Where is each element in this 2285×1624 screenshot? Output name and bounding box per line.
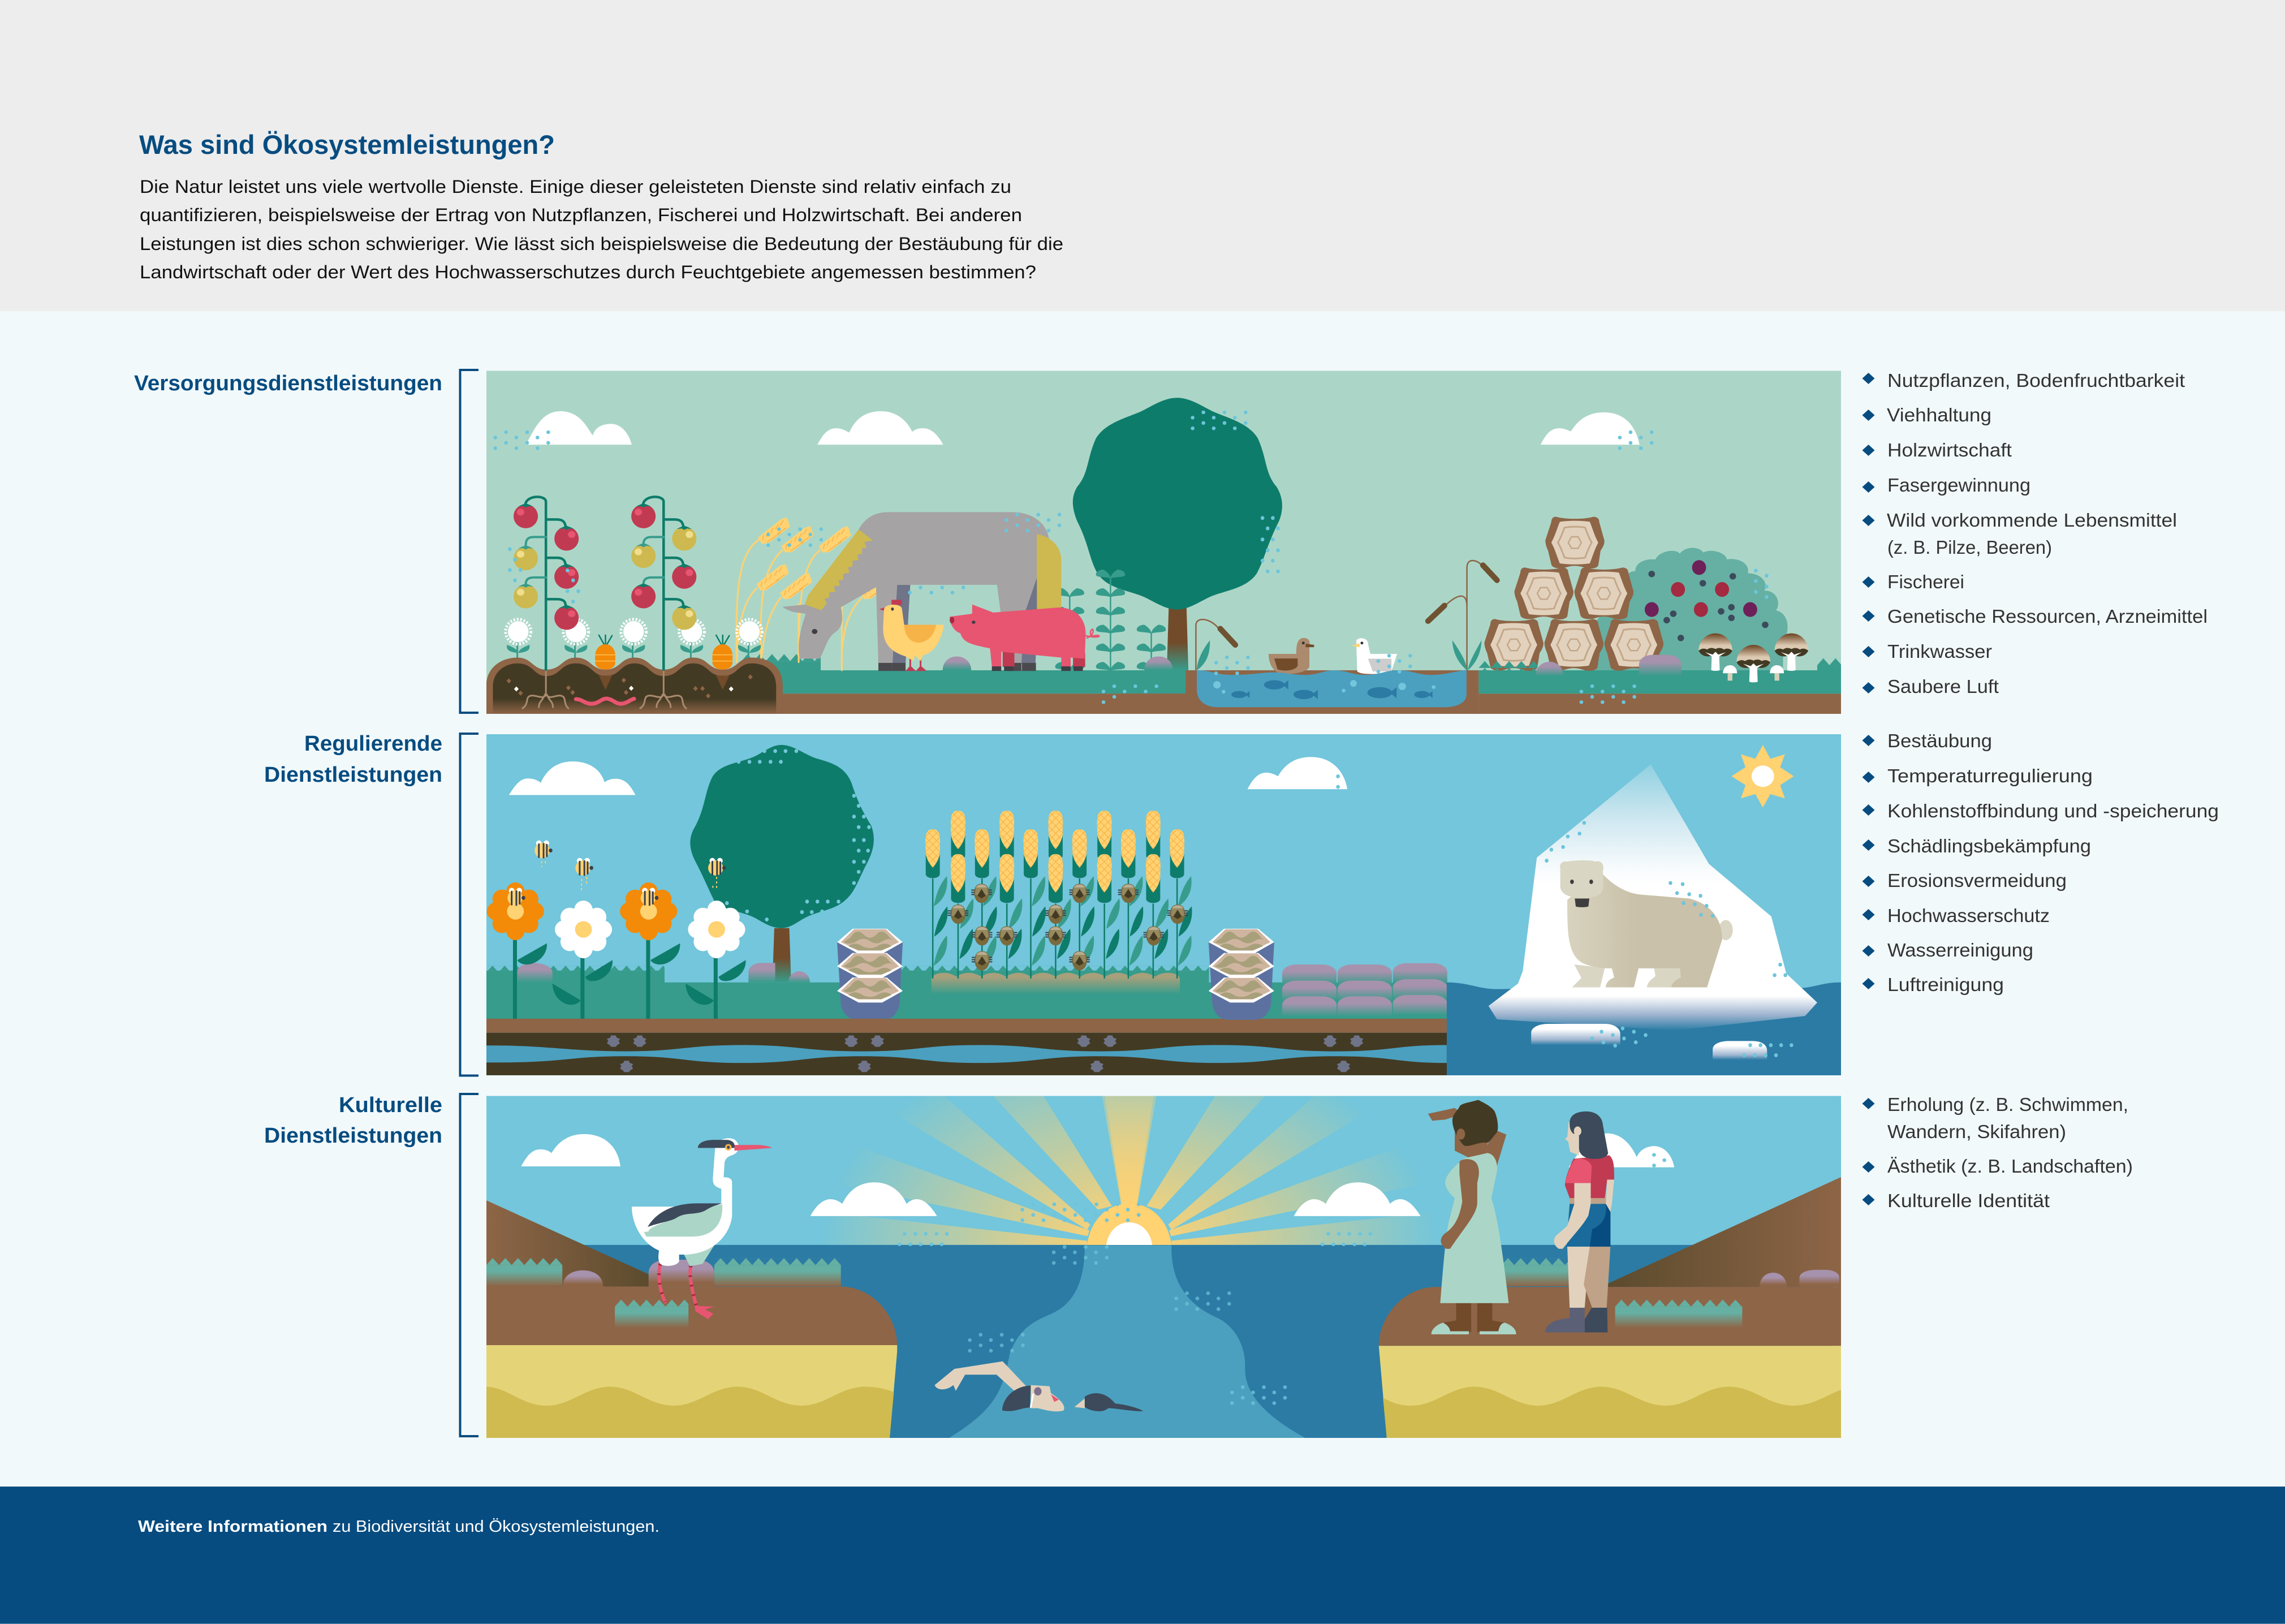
bees bbox=[507, 841, 726, 906]
corn plants bbox=[925, 811, 1192, 978]
white duck bbox=[1352, 638, 1397, 674]
cloud bbox=[509, 761, 636, 795]
list: Kulturelle Dienstleistungen: Erholung (z. B. Schwimmen, bbox=[1887, 1094, 2128, 1115]
raised bed bbox=[932, 973, 1180, 994]
heading: Regulierende Dienstleistungen: Dienstleistungen bbox=[264, 763, 442, 787]
iceberg bbox=[1489, 764, 1817, 1031]
sea bbox=[486, 1245, 1832, 1438]
water dots bbox=[1338, 776, 1791, 1056]
list: Regulierende Dienstleistungen: Kohlenstoffbindung und -speicherung bbox=[1887, 800, 2219, 821]
rocks grid bbox=[1282, 963, 1447, 1016]
rocks right bbox=[1144, 655, 1682, 676]
list: Regulierende Dienstleistungen: Bestäubung bbox=[1887, 730, 1992, 751]
list: Regulierende Dienstleistungen bbox=[1862, 730, 2219, 995]
list: Regulierende Dienstleistungen: Schädlingsbekämpfung bbox=[1887, 835, 2091, 856]
grass behind woman bbox=[1502, 1258, 1591, 1286]
tomato plant 1 bbox=[514, 497, 579, 670]
cloud bbox=[1248, 757, 1347, 789]
ground bbox=[741, 654, 1216, 714]
water dots right bbox=[1174, 1153, 1666, 1405]
right half of scene bbox=[1174, 1100, 1842, 1438]
list: Versorgungsdienstleistungen: Nutzpflanzen, Bodenfruchtbarkeit bbox=[1887, 370, 2185, 391]
tree bbox=[1073, 398, 1282, 670]
rocks bbox=[518, 963, 810, 983]
list: Kulturelle Dienstleistungen: Ästhetik (z. B. Landschaften) bbox=[1887, 1156, 2133, 1177]
intro text: Leistungen ist dies schon schwieriger. Wie lässt sich beispielsweise die Bedeutung der Bestäubung für die bbox=[140, 234, 1063, 254]
list: Versorgungsdienstleistungen: Genetische Ressourcen, Arzneimittel bbox=[1887, 606, 2208, 627]
heading: Versorgungsdienstleistungen: Versorgungsdienstleistungen bbox=[134, 372, 442, 395]
brown duck bbox=[1269, 638, 1314, 674]
list: Versorgungsdienstleistungen: Holzwirtschaft bbox=[1887, 440, 2012, 460]
water dots bbox=[493, 430, 1158, 704]
bracket: Kultur bbox=[460, 1094, 478, 1436]
wood logs bbox=[1485, 516, 1663, 671]
footer text: zu Biodiversität und Ökosystemleistungen. bbox=[333, 1518, 659, 1536]
heron bbox=[632, 1138, 772, 1319]
pot stack right bbox=[1209, 929, 1274, 1020]
list: Regulierende Dienstleistungen: Erosionsvermeidung bbox=[1887, 870, 2067, 891]
soil layers and groundwater bbox=[486, 1019, 1448, 1075]
left half of scene: crops, livestock, ground bbox=[486, 411, 1216, 714]
pond bbox=[1197, 670, 1467, 707]
ground right bbox=[1122, 670, 1844, 714]
list: Regulierende Dienstleistungen: Wasserreinigung bbox=[1887, 940, 2033, 960]
cloud bbox=[1541, 412, 1640, 445]
list: Versorgungsdienstleistungen: (z. B. Pilze, Beeren) bbox=[1887, 537, 2052, 558]
heading: Kulturelle Dienstleistungen: Kulturelle bbox=[339, 1093, 442, 1117]
sun rays bbox=[803, 1096, 1455, 1245]
pot stack left bbox=[837, 929, 903, 1020]
tomato plant 2 bbox=[631, 497, 696, 670]
list: Regulierende Dienstleistungen: Hochwasserschutz bbox=[1887, 905, 2050, 926]
carrots bbox=[595, 635, 732, 670]
swimmer bbox=[935, 1362, 1143, 1411]
panel: Regulierende Dienstleistungen illustration bbox=[486, 734, 1842, 1075]
list: Versorgungsdienstleistungen: Saubere Luft bbox=[1887, 676, 1999, 697]
water dots right bbox=[1214, 430, 1766, 704]
heading: Regulierende Dienstleistungen: Regulierende bbox=[304, 732, 442, 756]
wheat bbox=[736, 518, 893, 670]
rocks and grass right bbox=[1615, 1270, 1839, 1328]
header band bbox=[0, 0, 2285, 311]
list: Kulturelle Dienstleistungen: Wandern, Skifahren) bbox=[1887, 1121, 2066, 1142]
list: Versorgungsdienstleistungen: Wild vorkommende Lebensmittel bbox=[1887, 510, 2177, 531]
polar bear bbox=[1560, 860, 1733, 988]
chicken bbox=[879, 600, 944, 671]
right half of scene: pond, logs, bush, mushrooms bbox=[1122, 412, 1844, 714]
tree bbox=[690, 745, 874, 983]
left half and sun bbox=[486, 1096, 1832, 1438]
clouds bbox=[521, 1134, 937, 1216]
white flowers bbox=[506, 619, 762, 659]
list: Versorgungsdienstleistungen: Fischerei bbox=[1887, 571, 1964, 592]
list: Regulierende Dienstleistungen: Temperaturregulierung bbox=[1887, 765, 2093, 786]
list: Kulturelle Dienstleistungen: Kulturelle Identität bbox=[1887, 1190, 2050, 1211]
panel: Kulturelle Dienstleistungen illustration bbox=[486, 1096, 1842, 1438]
small floes bbox=[1531, 1024, 1767, 1060]
right shore bbox=[1379, 1287, 1842, 1438]
intro text: Die Natur leistet uns viele wertvolle Dienste. Einige dieser geleisteten Dienste sind relativ einfach zu bbox=[140, 176, 1011, 197]
donkey bbox=[782, 512, 1061, 671]
rocks bbox=[943, 656, 1173, 670]
bracket: Regulierung bbox=[460, 734, 478, 1076]
clouds bbox=[1294, 1134, 1674, 1216]
sun bbox=[1731, 745, 1794, 808]
water dots bbox=[898, 1203, 1140, 1352]
list: Versorgungsdienstleistungen: Fasergewinnung bbox=[1887, 475, 2030, 496]
list: Kulturelle Dienstleistungen bbox=[1862, 1094, 2133, 1211]
pig bbox=[950, 605, 1100, 671]
sea bbox=[1447, 983, 1842, 1075]
berry bush bbox=[1596, 548, 1788, 670]
title: Was sind Ökosystemleistungen? bbox=[139, 130, 555, 160]
list: Versorgungsdienstleistungen: Viehhaltung bbox=[1887, 404, 1991, 425]
heading: Kulturelle Dienstleistungen: Dienstleistungen bbox=[264, 1124, 442, 1148]
list: Versorgungsdienstleistungen: Trinkwasser bbox=[1887, 641, 1992, 662]
heading: Regulierende Dienstleistungen bbox=[264, 732, 442, 787]
footer text: Weitere Informationen bbox=[138, 1518, 327, 1536]
rocks and grass left bbox=[486, 1258, 841, 1328]
left and center of scene bbox=[486, 745, 1448, 1075]
intro text: Landwirtschaft oder der Wert des Hochwasserschutzes durch Feuchtgebiete angemessen bestimmen? bbox=[140, 262, 1036, 282]
woman in dress bbox=[1428, 1100, 1516, 1334]
footer text bbox=[138, 1518, 659, 1536]
footer band bbox=[0, 1487, 2285, 1624]
list: Regulierende Dienstleistungen: Luftreinigung bbox=[1887, 974, 2004, 995]
bracket: Versorgung bbox=[460, 370, 478, 713]
heading: Kulturelle Dienstleistungen bbox=[264, 1093, 442, 1148]
pest insects bbox=[949, 884, 1187, 970]
hill right bbox=[1608, 1177, 1842, 1287]
panel: Versorgungsdienstleistungen illustration bbox=[486, 371, 1844, 714]
meadow bbox=[486, 966, 1448, 1019]
intro text: quantifizieren, beispielsweise der Ertrag von Nutzpflanzen, Fischerei und Holzwirtschaft. Bei anderen bbox=[140, 205, 1022, 225]
grass tufts bbox=[1478, 658, 1842, 671]
sun disc bbox=[1087, 1203, 1171, 1245]
woman in shorts bbox=[1545, 1112, 1614, 1333]
leafy plants bbox=[1055, 570, 1166, 671]
mushrooms bbox=[1698, 634, 1808, 682]
intro text bbox=[140, 176, 1063, 282]
hill left bbox=[486, 1200, 649, 1287]
right of scene: sea, iceberg, bear bbox=[1209, 745, 1842, 1075]
left shore bbox=[486, 1286, 897, 1438]
soil mound bbox=[486, 657, 783, 714]
flowers bbox=[487, 882, 745, 1019]
cattails bbox=[1196, 561, 1497, 670]
clouds bbox=[526, 411, 943, 445]
list: Versorgungsdienstleistungen bbox=[1862, 370, 2208, 697]
